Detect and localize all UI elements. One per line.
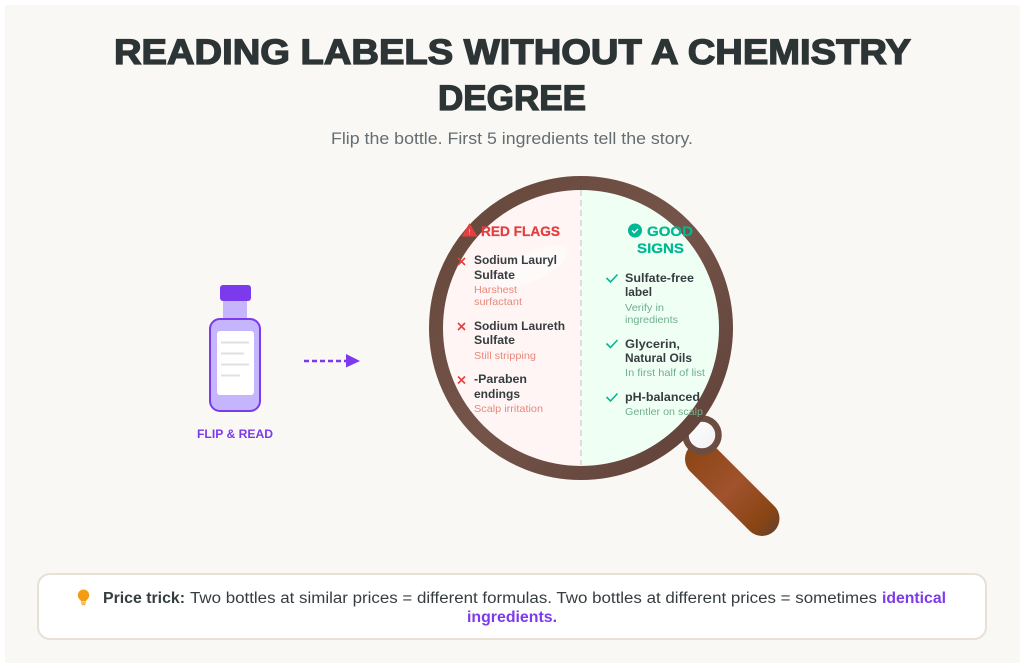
lens ring	[436, 183, 726, 473]
title: READING LABELS WITHOUT A CHEMISTRY	[114, 33, 911, 72]
title	[114, 33, 911, 118]
red flag item: parabens: endings	[474, 387, 520, 401]
good signs heading: GOOD	[647, 223, 693, 239]
red flag item: SLES: Sodium Laureth	[474, 319, 565, 333]
good sign item: pH-balanced: Gentler on scalp	[625, 406, 703, 418]
red flag item: SLS	[458, 253, 557, 308]
good sign item: pH-balanced: pH-balanced	[625, 390, 700, 404]
callout box	[38, 574, 986, 639]
good sign item: pH-balanced	[606, 390, 703, 418]
callout text: Two bottles at similar prices = different formulas. Two bottles at different prices = sometimes	[190, 590, 877, 607]
magnifying glass	[436, 183, 762, 518]
arrow	[304, 354, 360, 368]
red flag item: SLES: Sulfate	[474, 333, 515, 347]
red flag item: SLES: Still stripping	[474, 350, 536, 362]
red flag item: parabens: -Paraben	[474, 372, 527, 386]
icon: check circle	[628, 224, 642, 238]
bottle caption: FLIP & READ	[197, 427, 273, 441]
callout text: Price trick:	[103, 590, 185, 607]
magnifier handle	[702, 459, 762, 518]
red flag item: SLS: surfactant	[474, 296, 522, 308]
panel: good signs	[606, 223, 705, 418]
good sign item: sulfate-free: label	[625, 285, 652, 299]
good sign item: sulfate-free: ingredients	[625, 314, 678, 326]
good sign item: glycerin: In first half of list	[625, 367, 705, 379]
good sign item: sulfate-free: Verify in	[625, 302, 664, 314]
red flag item: parabens	[458, 372, 543, 415]
red flag item: SLS: Sodium Lauryl	[474, 253, 557, 267]
callout text: ingredients.	[467, 609, 557, 626]
icon: warning triangle	[462, 224, 476, 236]
callout text: identical	[882, 590, 946, 607]
red flags heading: RED FLAGS	[481, 223, 560, 239]
panel: red flags	[458, 223, 565, 415]
good sign item: glycerin: Natural Oils	[625, 351, 692, 365]
red flag item: SLS: Harshest	[474, 284, 517, 296]
icon: bottle	[210, 285, 260, 411]
subtitle: Flip the bottle. First 5 ingredients tell the story.	[331, 130, 693, 148]
good signs heading: SIGNS	[637, 240, 684, 256]
red flag item: SLES	[458, 319, 565, 362]
callout text	[103, 590, 946, 626]
callout: price trick	[38, 574, 986, 639]
icon: light bulb	[78, 590, 89, 605]
good signs heading	[637, 223, 693, 256]
good sign item: glycerin	[606, 337, 705, 379]
good sign item: glycerin: Glycerin,	[625, 337, 680, 351]
magnifier knob ring	[686, 418, 718, 452]
good sign item: sulfate-free	[606, 271, 694, 326]
red flag item: SLS: Sulfate	[474, 268, 515, 282]
red flag item: parabens: Scalp irritation	[474, 403, 543, 415]
lens interior	[580, 190, 719, 466]
good sign item: sulfate-free: Sulfate-free	[625, 271, 694, 285]
title: DEGREE	[438, 79, 586, 118]
